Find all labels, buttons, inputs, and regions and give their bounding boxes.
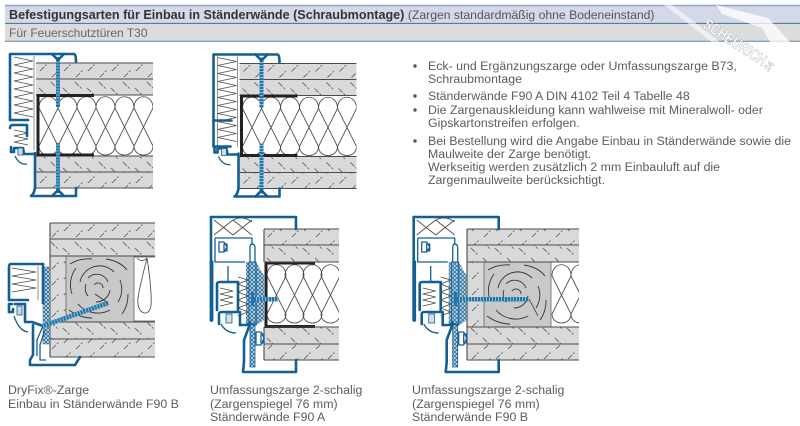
- diagram: top middle wall section: [214, 54, 366, 196]
- caption: DryFix frame: DryFix®-Zarge: [8, 383, 89, 397]
- feature bullet list: Maulweite der Zarge benötigt.: [428, 147, 591, 161]
- caption: DryFix frame: Einbau in Ständerwände F90 B: [8, 397, 179, 411]
- caption: Umfassungszarge F90 B: Umfassungszarge 2-schalig: [412, 383, 564, 397]
- caption: Umfassungszarge F90 A: (Zargenspiegel 76 mm): [210, 397, 338, 411]
- caption: Umfassungszarge F90 A: Umfassungszarge 2-schalig: [210, 383, 362, 397]
- feature bullet list: Zargenmaulweite berücksichtigt.: [428, 173, 605, 187]
- feature bullet list: Die Zargenauskleidung kann wahlweise mit Mineralwoll- oder: [428, 103, 763, 117]
- watermark name: SCHEURICH: [700, 16, 769, 70]
- feature bullet list: Bei Bestellung wird die Angabe Einbau in Ständerwände sowie die: [428, 134, 791, 148]
- feature bullet list: Ständerwände F90 A DIN 4102 Teil 4 Tabelle 48: [428, 89, 690, 103]
- subtitle text: Für Feuerschutztüren T30: [9, 26, 148, 40]
- feature bullet list: [413, 59, 791, 187]
- title text: Befestigungsarten für Einbau in Ständerwände (Schraubmontage) (Zargen standardmäßig ohne Bodeneinstand): [9, 8, 654, 22]
- diagram: Umfassungszarge F90 A: [211, 217, 351, 372]
- title bar: [5, 5, 800, 24]
- watermark logo: [662, 0, 800, 108]
- caption: Umfassungszarge F90 B: Ständerwände F90 B: [412, 410, 528, 424]
- feature bullet list: Schraubmontage: [428, 72, 522, 86]
- feature bullet list: Eck- und Ergänzungszarge oder Umfassungszarge B73,: [428, 59, 737, 73]
- diagram: top left wall section: [10, 54, 163, 196]
- feature bullet list: Gipskartonstreifen erfolgen.: [428, 116, 580, 130]
- caption: Umfassungszarge F90 B: (Zargenspiegel 76 mm): [412, 397, 540, 411]
- watermark number: 24: [762, 59, 776, 73]
- caption: Umfassungszarge F90 A: Ständerwände F90 A: [210, 410, 326, 424]
- feature bullet list: Werkseitig werden zusätzlich 2 mm Einbauluft auf die: [428, 160, 720, 174]
- diagram: Umfassungszarge F90 B: [414, 217, 591, 372]
- subtitle bar: [5, 24, 800, 41]
- diagram: DryFix frame: [9, 223, 155, 365]
